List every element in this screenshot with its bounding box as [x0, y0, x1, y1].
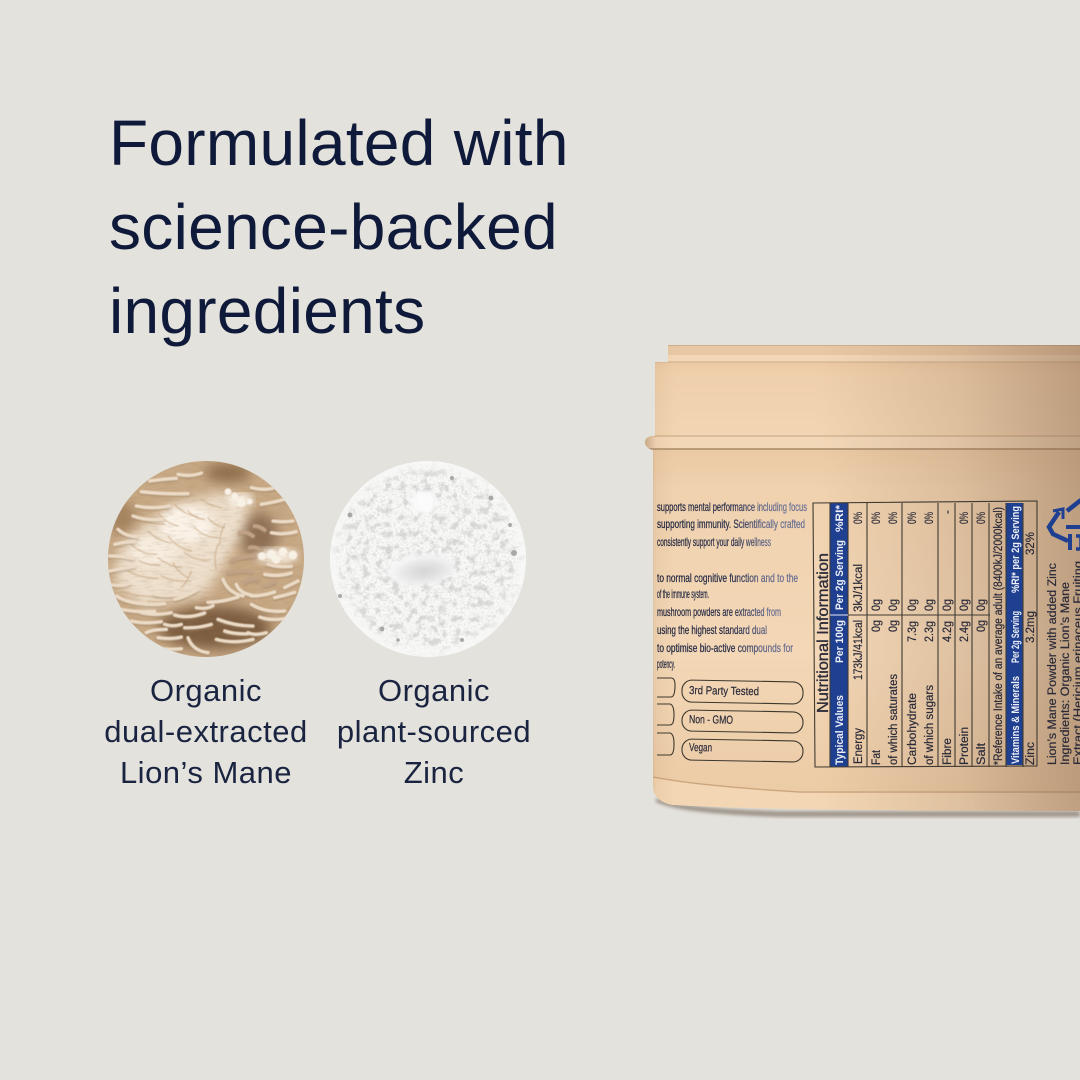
caption: Zinc: Zinc [404, 755, 464, 790]
table header fills [830, 503, 848, 767]
table text: Energy [853, 728, 865, 764]
table text: Typical Values [834, 695, 846, 765]
caption: Zinc [337, 673, 531, 790]
table text: 3kJ/1kcal [853, 564, 865, 612]
powder dip [388, 554, 454, 586]
table text: Per 100g [834, 620, 846, 663]
tin label: description copy: to optimise bio-active compounds for [657, 641, 793, 655]
mushroom light strands [110, 473, 298, 653]
table text: - [942, 510, 954, 514]
table text: 0g [888, 620, 900, 632]
table text: 4.2g [942, 621, 954, 642]
table text: 0g [976, 620, 988, 632]
table text: 0g [888, 599, 900, 611]
table text: Fibre [942, 738, 954, 765]
table text: Per 2g Serving [834, 540, 846, 610]
tin surfaces [645, 340, 1080, 820]
table text: 0% [976, 512, 988, 524]
mushroom dark regions [106, 463, 278, 649]
image: zinc powder [330, 461, 526, 657]
powder specks [338, 476, 517, 642]
table text: %RI* [834, 504, 846, 532]
caption: Lion's Mane: Lion’s Mane [120, 755, 292, 790]
table lines [813, 501, 1037, 767]
mushroom cream mass [116, 493, 251, 608]
table text: Zinc [1025, 742, 1037, 765]
table text: 0% [888, 512, 900, 524]
product tin: Non - GMO [689, 714, 733, 727]
product tin [645, 340, 1080, 820]
title [109, 107, 569, 347]
table text: %RI* per 2g Serving [1010, 506, 1022, 593]
table text: 0g [871, 599, 883, 611]
tin label: description copy: supporting immunity. Scientifically crafted [657, 517, 805, 531]
table text: 0% [924, 512, 936, 524]
tin label: description copy: supports mental performance including focus [657, 500, 807, 514]
table text: 2.4g [959, 621, 971, 642]
title: ingredients [109, 275, 425, 347]
mushroom crumbs [225, 488, 297, 564]
table text: 0g [907, 599, 919, 611]
table text: of which saturates [888, 674, 900, 765]
table text: 3.2mg [1025, 611, 1037, 643]
tin label: description copy: using the highest standard dual [657, 623, 767, 637]
table text: 0g [942, 599, 954, 611]
tin label: description copy: potency. [657, 657, 675, 671]
table text: 173kJ/41kcal [853, 620, 865, 680]
table text: Protein [959, 727, 971, 765]
table text: 0g [976, 599, 988, 611]
table text: Fat [871, 749, 883, 765]
tin label: ingredients text [1047, 561, 1080, 765]
table text: Salt [976, 742, 988, 765]
table text: 0g [924, 599, 936, 611]
tin horizontal shading [645, 340, 1080, 820]
table text: 0g [959, 599, 971, 611]
table text: *Reference Intake of an average adult (8400kJ/2000kcal) [993, 507, 1005, 765]
tin label: description copy: consistently support your daily wellness [657, 535, 771, 549]
tin label: description copy: mushroom powders are extracted from [657, 605, 781, 619]
table text: 0% [853, 512, 865, 524]
table text: 0% [871, 512, 883, 524]
tin label: description copy: to normal cognitive function and to the [657, 571, 798, 585]
caption: Lion's Mane: Organic [150, 673, 262, 708]
tin shadow [656, 798, 1080, 817]
tin label: ingredients text: Ingredients: Organic Lion’s Mane [1060, 582, 1072, 765]
table text: 0% [907, 512, 919, 524]
tin label: description copy [657, 500, 807, 671]
table text: 2.3g [924, 621, 936, 642]
tin label: nutrition table [813, 501, 1037, 767]
title: Formulated with [109, 107, 569, 179]
tin label: ingredients text: Lion’s Mane Powder with added Zinc [1047, 563, 1059, 765]
tin label: description copy: of the immune system. [657, 587, 709, 601]
table text: Carbohydrate [907, 693, 919, 765]
table text: Per 2g Serving [1010, 611, 1022, 663]
ingredient images and product tin [108, 345, 1080, 819]
table text: 0g [871, 620, 883, 632]
product tin: 3rd Party Tested [689, 685, 759, 698]
table text: 7.3g [907, 621, 919, 642]
table text: 32% [1025, 532, 1037, 555]
table text: Nutritional Information [815, 553, 832, 713]
icon: recycling symbol [1049, 500, 1080, 550]
table text: of which sugars [924, 685, 936, 765]
caption: Lion's Mane [104, 673, 308, 790]
caption: Zinc: plant-sourced [337, 714, 531, 749]
title: science-backed [109, 191, 558, 263]
table text [815, 504, 1037, 765]
caption: Zinc: Organic [378, 673, 490, 708]
mushroom right mid curls [228, 526, 275, 586]
product tin: Vegan [689, 742, 712, 754]
tin label: badges [657, 678, 803, 762]
mushroom tan strands on mass [121, 499, 225, 602]
caption: Lion's Mane: dual-extracted [104, 714, 308, 749]
image: lion's mane mushroom [106, 461, 304, 657]
table text: Vitamins & Minerals [1010, 676, 1022, 764]
table text: 0% [959, 512, 971, 524]
